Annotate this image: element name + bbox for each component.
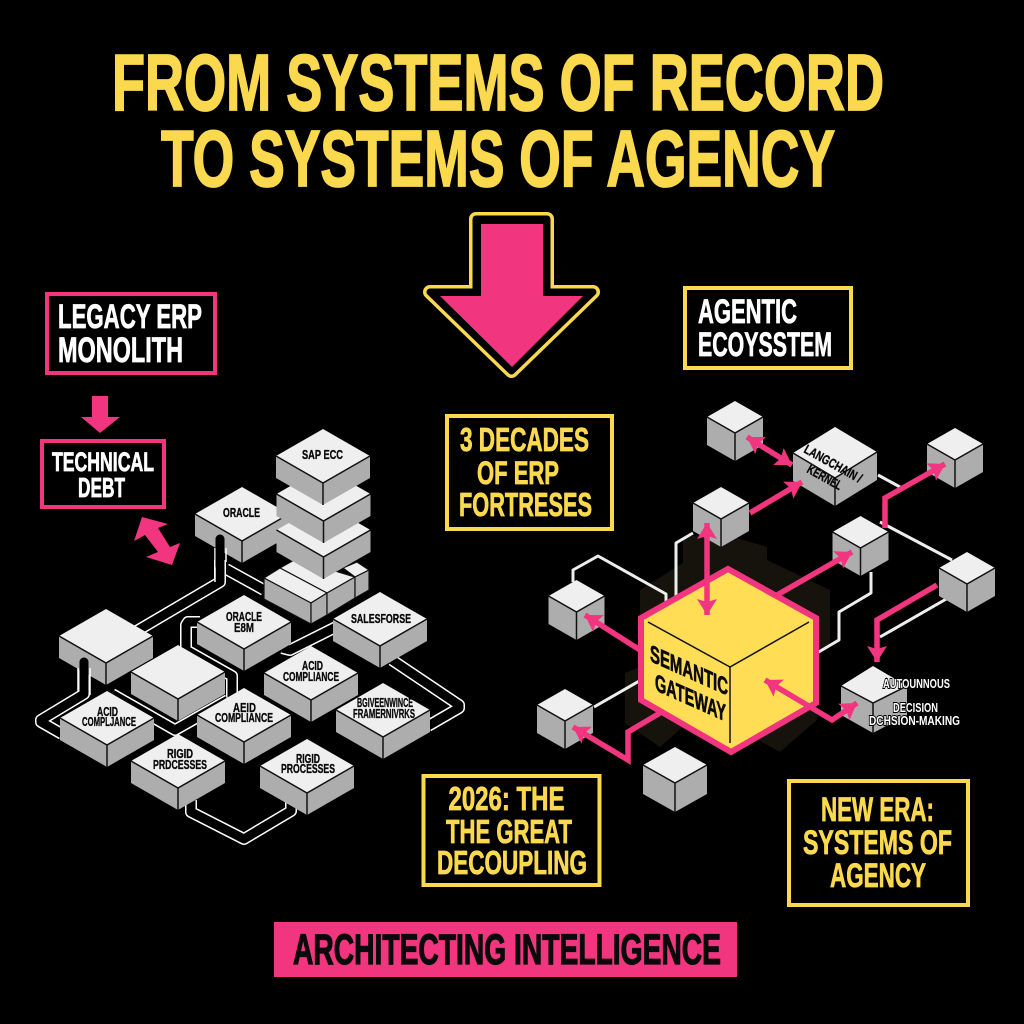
panel: technical debt label: TECHNICAL [52,447,154,477]
connector slots cut into blocks [78,539,226,695]
node: LangChain / Kernel: KERNEL [805,462,845,493]
block: blank upper left [59,609,153,685]
text: autonomous decision-making [869,676,960,728]
panel: new era label: NEW ERA: [821,791,934,829]
block: governance frameworks: FRAMERNIVRKS [353,706,415,721]
block: SAP ECC: SAP ECC [302,447,343,462]
block: rigid processes left: RIGID [167,746,193,761]
node: semantic gateway cube: SEMANTIC [650,640,728,701]
panel: legacy ERP monolith label: LEGACY ERP [58,298,202,336]
node: left cube [548,580,604,640]
block: Oracle E8M: E8M [234,620,254,635]
text: autonomous decision-making: DECISION [893,700,938,715]
arrows: agentic flows [573,437,945,760]
block: ACID compliance left [60,691,154,767]
block: AEID compliance [197,688,291,764]
node: right middle cube [832,516,888,576]
block: stacked ERP tier 3 [276,503,370,579]
block: AEID compliance: COMPLIANCE [215,710,273,725]
node: far right cube [939,552,995,612]
block: rigid processes right: PROCESSES [281,761,335,776]
panel: legacy ERP monolith label [47,294,215,373]
block: Oracle: ORACLE [223,505,260,520]
panel: 3 decades label: FORTRESES [459,486,592,523]
text: autonomous decision-making: AUTOUNNOUS [883,676,950,691]
block: rigid processes right: RIGID [296,751,320,766]
node: top left cube [707,401,763,461]
block: blank centre [131,645,225,721]
node: upper middle cube [693,487,749,547]
panel: new era label [789,781,968,905]
panel: 3 decades label: 3 DECADES [460,421,589,458]
arrow: main transition arrow [430,219,593,371]
block: rigid processes left: PRDCESSES [153,757,207,772]
block: base cluster of monolith stack [264,559,369,624]
node: LangChain / Kernel: LANGCHAIN / [802,442,865,486]
node: semantic gateway cube [641,569,816,752]
chart: legacy connectors [41,560,459,839]
panel: 3 decades label: OF ERP [477,455,559,491]
banner: architecting intelligence: ARCHITECTING INTELLIGENCE [293,926,721,974]
block: rigid processes right [260,739,354,815]
block: AEID compliance: AEID [233,700,256,715]
panel: agentic ecosystem label [685,288,851,368]
block: ACID compliance left: COMPLJANCE [82,714,136,729]
node: bottom cube [643,747,707,812]
panel: 2026 great decoupling label [424,776,600,885]
shadow behind semantic gateway [625,533,830,752]
block: ACID compliance right: ACID [302,658,323,673]
block: stacked ERP tier 2 [276,467,370,543]
node: lower left cube [537,689,593,749]
block: Salesforse [333,592,427,668]
node: autonomous decision-making cube [841,666,907,733]
block: ACID compliance left: ACID [97,704,118,719]
node: LangChain / Kernel [793,427,877,506]
title [112,38,884,203]
panel: 2026 great decoupling label: DECOUPLING [437,844,587,881]
block: ACID compliance right [264,646,358,722]
panel: agentic ecosystem label: ECOYSSTEM [698,326,832,364]
block: ACID compliance right: COMPLIANCE [283,669,339,684]
arrow: monolith to technical debt [81,396,120,433]
panel: technical debt label [42,441,164,507]
panel: 2026 great decoupling label: THE GREAT [446,813,572,850]
block: governance frameworks [336,683,430,759]
agentic white connectors [573,475,952,707]
panel: technical debt label: DEBT [78,472,125,503]
block: Salesforse: SALESFORSE [351,611,411,626]
node: semantic gateway cube: GATEWAY [655,669,726,727]
block: SAP ECC [276,429,370,505]
block: rigid processes left [131,734,225,810]
arrow: technical debt double arrow [134,517,180,565]
panel: 3 decades label [447,416,612,529]
block: Oracle E8M [197,595,291,671]
block: governance frameworks: BGIVEENWINCE [357,695,413,710]
panel: new era label: AGENCY [830,857,926,895]
banner: architecting intelligence [274,922,737,977]
block: Oracle [195,487,289,563]
panel: agentic ecosystem label: AGENTIC [698,293,797,331]
panel: legacy ERP monolith label: MONOLITH [58,331,183,370]
node: top right cube [927,428,983,488]
panel: new era label: SYSTEMS OF [803,824,952,862]
block: Oracle E8M: ORACLE [226,609,262,624]
text: autonomous decision-making: DCHSION-MAKING [869,713,960,728]
panel: 2026 great decoupling label: 2026: THE [448,780,564,817]
